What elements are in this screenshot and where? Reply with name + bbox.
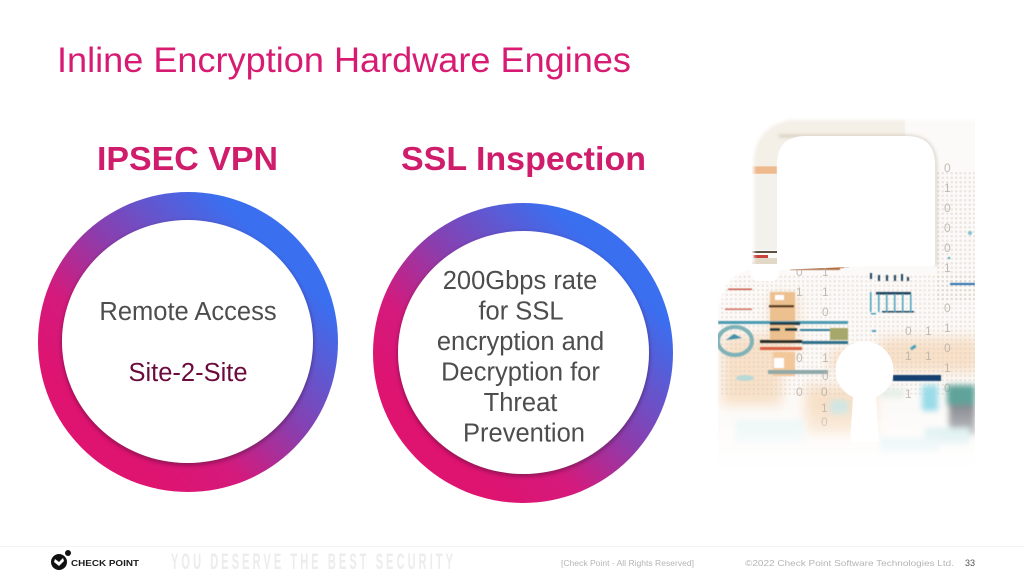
footer: copyright: ©2022 Check Point Software Technologies Ltd. [745,558,954,568]
binary digits: 1 [822,351,829,365]
binary digits: 0 [944,161,951,175]
binary digits: 0 [905,324,912,338]
binary digits: 0 [944,241,951,255]
text: SSL inspection description: for SSL [478,298,564,326]
panel: IPSEC VPN ring [38,192,338,492]
binary digits: 0 [944,381,951,395]
title: Inline Encryption Hardware Engines [57,40,631,80]
binary digits: 0 [822,305,829,319]
text: SSL inspection description: encryption and [437,328,604,356]
window inner shadow [779,136,936,266]
binary digits: 1 [925,324,932,338]
binary digits: 0 [796,265,803,279]
circuit blocks [718,264,849,381]
binary digits: 1 [944,321,951,335]
binary digits: 0 [822,369,829,383]
binary digits: 1 [905,387,912,401]
text: SSL inspection description: Decryption for [441,358,600,386]
text: SSL inspection description: Prevention [463,420,585,448]
binary digits: 0 [796,385,803,399]
binary digits: 0 [821,415,828,429]
text: SSL inspection description: 200Gbps rate [443,267,597,295]
peach tones [722,295,980,435]
panel: SSL Inspection ring [373,203,673,503]
shackle shading [752,166,777,174]
binary digits: 1 [822,285,829,299]
logo: Check Point: CHECK POINT [71,558,140,568]
footer divider [0,546,1024,547]
page number: 33 [965,558,975,568]
text: Remote Access: Remote Access [99,298,277,326]
binary digits: 1 [822,265,829,279]
keyhole [836,341,894,442]
binary digits: 0 [821,385,828,399]
logo: Check Point [51,550,140,570]
footer: rights reserved: [Check Point - All Rights Reserved] [561,558,694,568]
binary digits: 0 [944,201,951,215]
comb chart [870,231,975,350]
dark bands and teal blocks, lower right [893,375,941,381]
binary digits: 0 [944,341,951,355]
text: SSL inspection description [437,267,604,448]
soft edge of padlock [718,118,975,305]
binary digits: 0 [944,301,951,315]
heading: SSL Inspection: SSL Inspection [401,140,646,177]
binary digits: 0 [944,221,951,235]
binary digits: 1 [796,285,803,299]
binary digits: 1 [821,401,828,415]
binary digits: 1 [944,261,951,275]
text: SSL inspection description: Threat [484,389,557,417]
binary digits: 1 [925,349,932,363]
binary digits: 0 [796,351,803,365]
binary digits: 1 [944,181,951,195]
heading: IPSEC VPN: IPSEC VPN [97,140,278,177]
binary digits: 1 [905,349,912,363]
image: padlock with circuit board texture [718,120,975,450]
text: Site-2-Site: Site-2-Site [128,359,248,387]
slogan: YOU DESERVE THE BEST SECURITY [171,549,453,574]
binary digits [796,161,951,429]
binary digits: 1 [944,361,951,375]
